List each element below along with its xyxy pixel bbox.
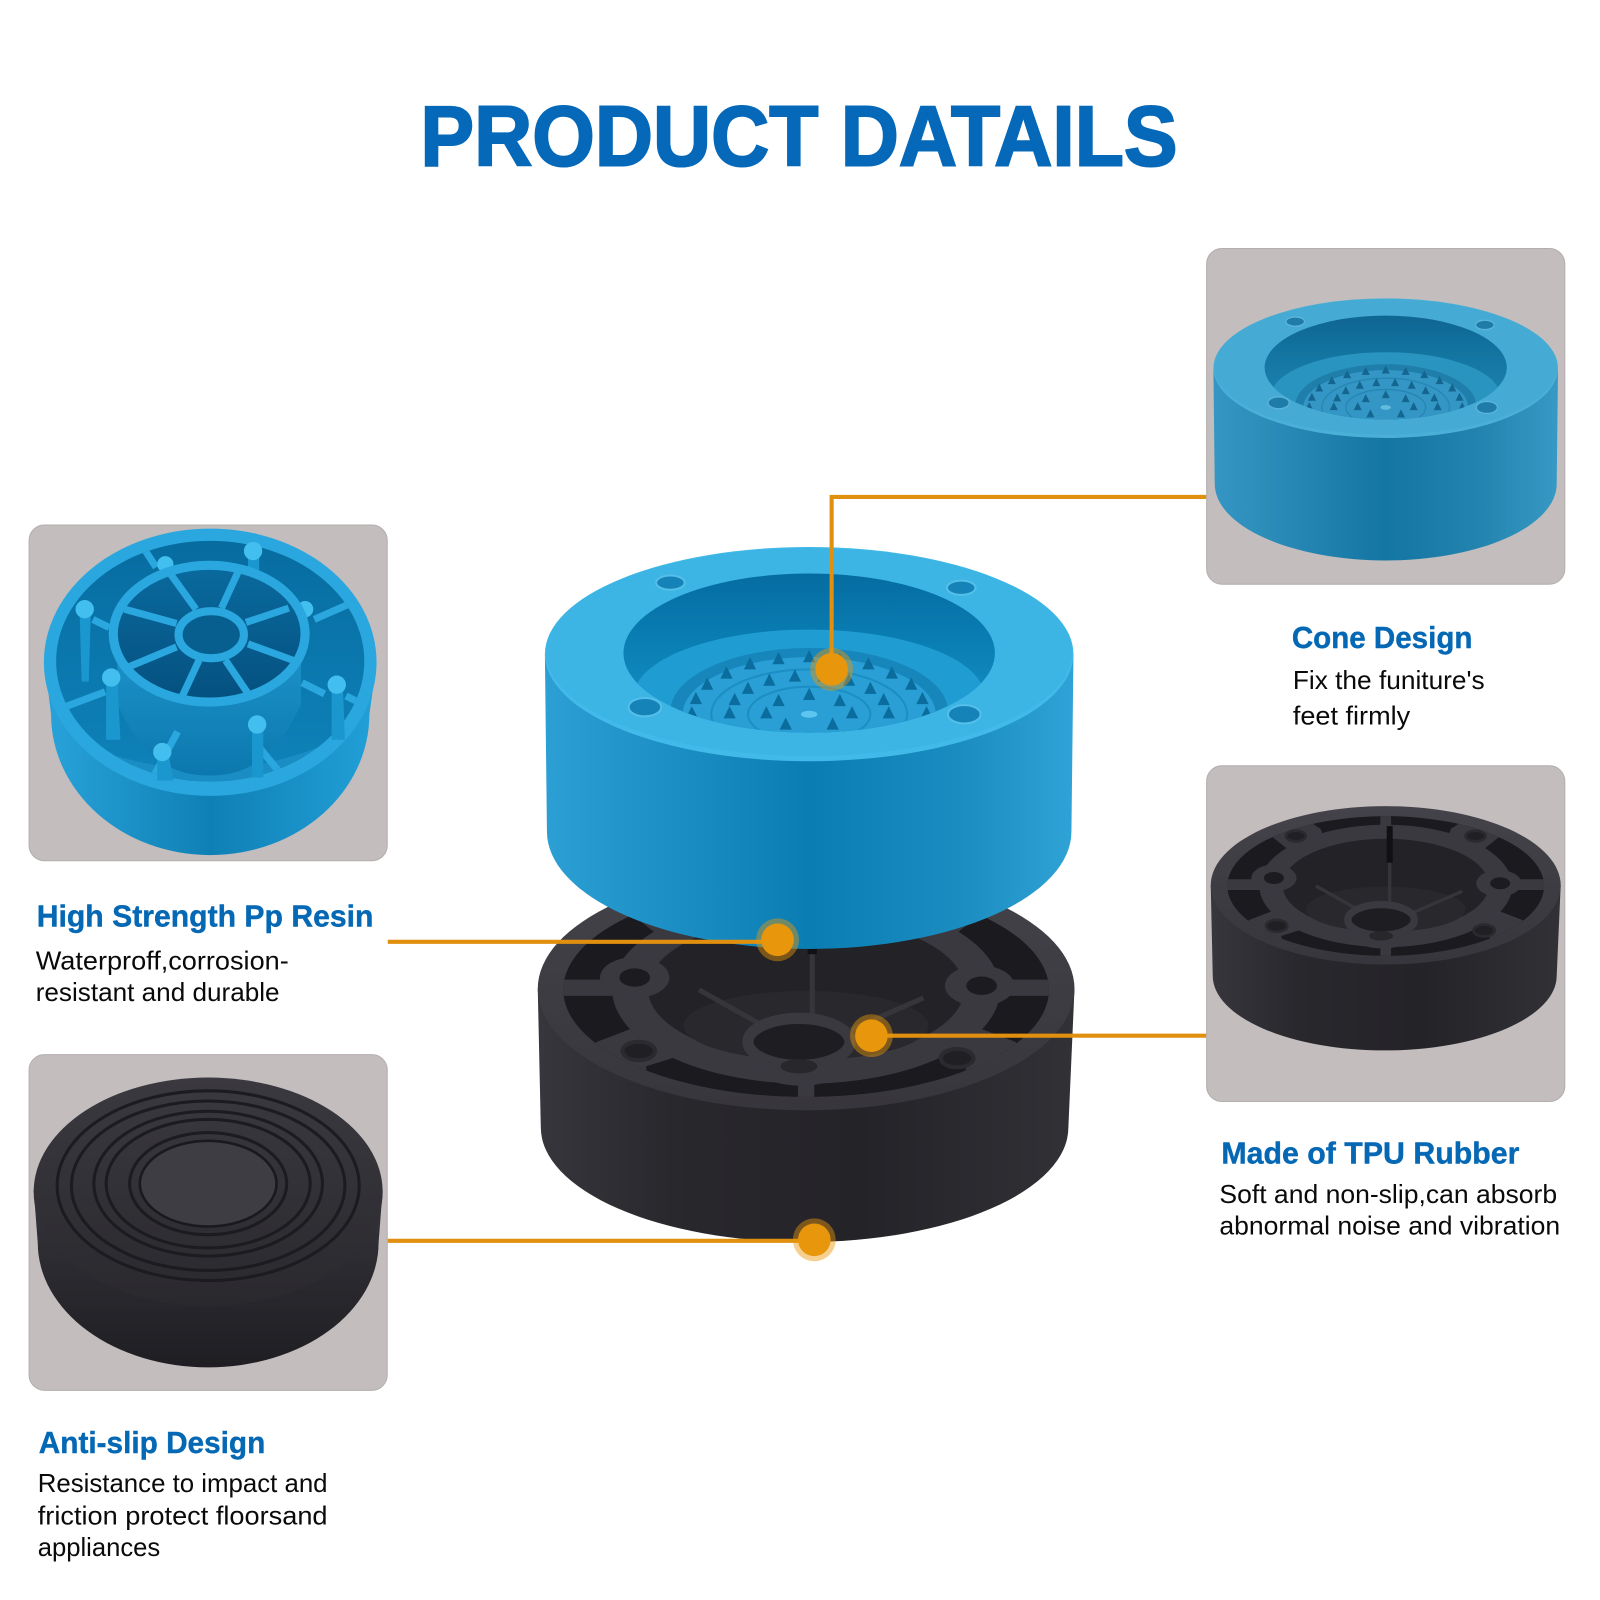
text block: TPU rubber: Made of TPU Rubber [1221, 1136, 1519, 1170]
pins [80, 551, 345, 781]
text block: PP resin: High Strength Pp Resin [37, 900, 373, 934]
leader line: PP resin [388, 918, 799, 961]
text block: TPU rubber: abnormal noise and vibration [1219, 1213, 1560, 1241]
panel: cone design photo [1207, 248, 1565, 584]
text block: cone design [1292, 621, 1485, 730]
text block: TPU rubber [1219, 1136, 1560, 1241]
text block: anti-slip: appliances [38, 1534, 160, 1562]
leader line: TPU rubber [850, 1014, 1206, 1057]
title: PRODUCT DATAILS [420, 88, 1178, 184]
icon: black grooved pad [34, 1078, 383, 1367]
text block: PP resin [36, 900, 373, 1007]
text block: cone design: Fix the funiture's [1293, 667, 1485, 695]
icon: blue puck underside [44, 529, 377, 855]
text block: anti-slip: friction protect floorsand [38, 1502, 328, 1530]
icon: black open-side base [1211, 799, 1561, 1050]
text block: cone design: Cone Design [1292, 621, 1472, 655]
text block: TPU rubber: Soft and non-slip,can absorb [1219, 1181, 1557, 1209]
main product: black base [538, 857, 1074, 1242]
leader line: cone design [810, 497, 1206, 691]
icon: blue cone-side puck [1213, 298, 1558, 560]
leader line: anti-slip [388, 1218, 836, 1261]
main product: blue top [545, 547, 1073, 949]
panel: PP resin photo [29, 525, 387, 861]
text block: PP resin: resistant and durable [36, 979, 280, 1007]
text block: anti-slip: Anti-slip Design [39, 1426, 265, 1460]
text block: anti-slip: Resistance to impact and [38, 1470, 328, 1498]
text block: PP resin: Waterproff,corrosion- [36, 947, 289, 975]
text block: anti-slip [38, 1426, 328, 1562]
panel: TPU rubber photo [1207, 766, 1565, 1102]
text block: cone design: feet firmly [1293, 702, 1410, 730]
panel: anti-slip photo [29, 1055, 387, 1390]
